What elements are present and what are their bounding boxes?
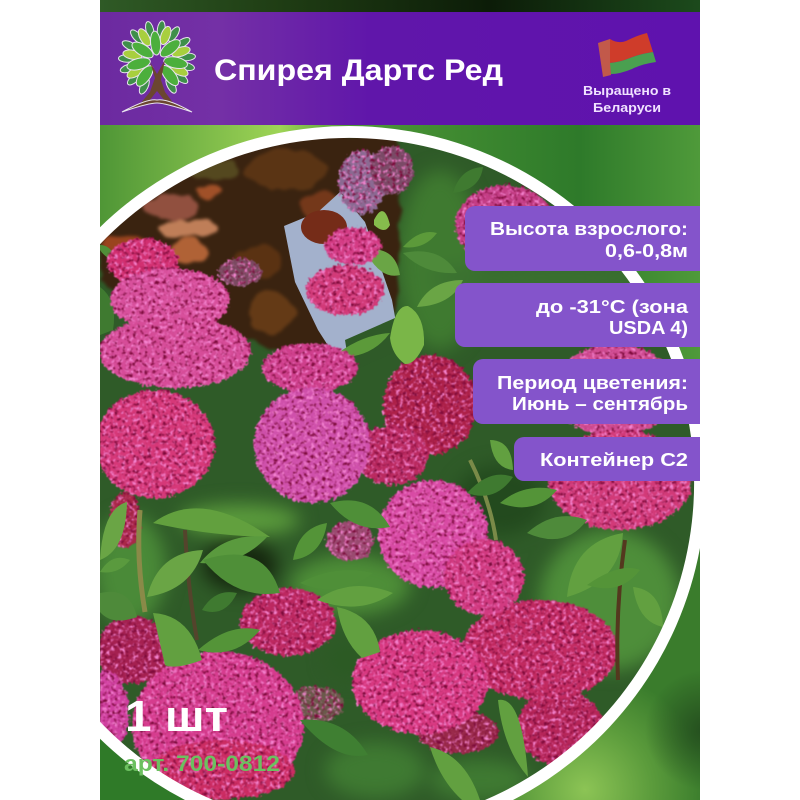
white circular frame <box>100 126 700 800</box>
caption: grown in Belarus: Выращено в <box>583 84 671 98</box>
article number: арт. 700-0812 <box>124 751 280 776</box>
panel: frost hardiness: до -31°C (зона <box>536 297 689 317</box>
panel: container: Контейнер С2 <box>540 450 688 470</box>
lilac buds <box>218 146 414 286</box>
icon: flag of Belarus <box>598 33 656 77</box>
autumn brown foliage <box>100 135 400 360</box>
back leaves <box>100 167 483 357</box>
background: blurred green garden <box>100 0 700 800</box>
panel: frost hardiness: USDA 4) <box>609 318 688 338</box>
panel: flowering period <box>473 359 700 424</box>
panel: frost hardiness <box>455 283 700 347</box>
panel: height: 0,6-0,8м <box>605 241 688 261</box>
panel: height <box>465 206 700 271</box>
white-blue sign behind the bush <box>284 192 396 351</box>
flower clusters <box>81 185 692 800</box>
caption: grown in Belarus <box>583 84 671 115</box>
panel: height: Высота взрослого: <box>490 219 688 239</box>
header band <box>100 12 700 125</box>
icon: tree logo <box>118 20 196 112</box>
panel: flowering period: Период цветения: <box>497 373 688 393</box>
soft foliage tones <box>94 170 690 800</box>
panel: container <box>514 437 700 481</box>
caption: grown in Belarus: Беларуси <box>593 101 661 115</box>
quantity label: 1 шт <box>125 692 228 741</box>
front leaves and stems <box>100 306 663 800</box>
panel: flowering period: Июнь – сентябрь <box>512 394 688 414</box>
title: Спирея Дартс Ред <box>214 54 503 87</box>
photo: spirea bush in circular frame <box>81 125 700 800</box>
